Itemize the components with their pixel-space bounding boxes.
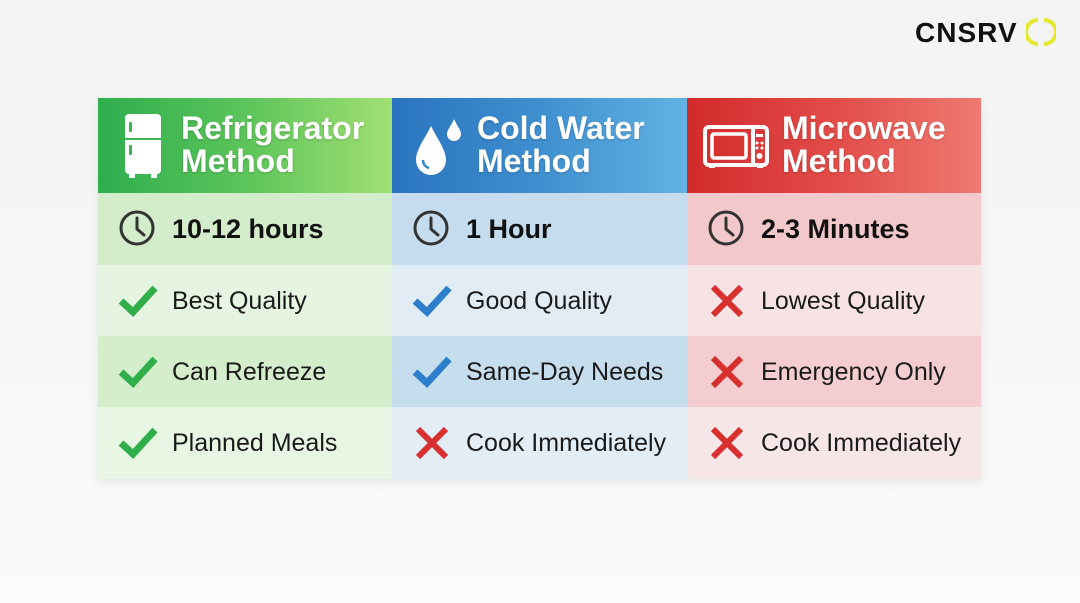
row: time [392, 193, 687, 265]
header: cold water [392, 98, 687, 193]
row: same-day needs: Same-Day Needs [466, 358, 663, 386]
row: can refreeze: Can Refreeze [172, 358, 326, 386]
row: good quality: Good Quality [466, 287, 612, 315]
panel: cold water method [392, 98, 687, 479]
row: time: 1 Hour [466, 214, 552, 244]
row: lowest quality: Lowest Quality [761, 287, 925, 315]
header: refrigerator: Method [181, 143, 295, 179]
row: time: 10-12 hours [172, 214, 324, 244]
icon: water drops [416, 119, 461, 175]
row: can refreeze [98, 336, 393, 408]
logo: CNSRV [915, 17, 1018, 48]
row: time: 2-3 Minutes [761, 214, 910, 244]
row: emergency only [687, 336, 981, 408]
header: microwave: Method [782, 143, 896, 179]
row: good quality [392, 265, 687, 337]
header: microwave: Microwave [782, 110, 946, 146]
header: refrigerator: Refrigerator [181, 110, 364, 146]
row: best quality [98, 265, 393, 337]
row: lowest quality [687, 265, 981, 337]
panel: refrigerator method [98, 98, 392, 479]
row: planned meals: Planned Meals [172, 429, 337, 457]
row: time [98, 193, 393, 265]
header: cold water: Method [477, 143, 591, 179]
header: refrigerator [98, 98, 393, 193]
row: planned meals [98, 407, 393, 479]
header: microwave [687, 98, 981, 193]
icon: fridge [125, 114, 161, 178]
row: emergency only: Emergency Only [761, 358, 946, 386]
row: cook immediately [392, 407, 687, 479]
row: same-day needs [392, 336, 687, 408]
row: time [687, 193, 981, 265]
row: cook immediately [687, 407, 981, 479]
panel: microwave method [687, 98, 981, 479]
row: cook immediately: Cook Immediately [761, 429, 961, 457]
comparison table [98, 98, 981, 479]
header: cold water: Cold Water [477, 110, 645, 146]
row: best quality: Best Quality [172, 287, 307, 315]
icon: microwave [703, 125, 769, 168]
row: cook immediately: Cook Immediately [466, 429, 666, 457]
